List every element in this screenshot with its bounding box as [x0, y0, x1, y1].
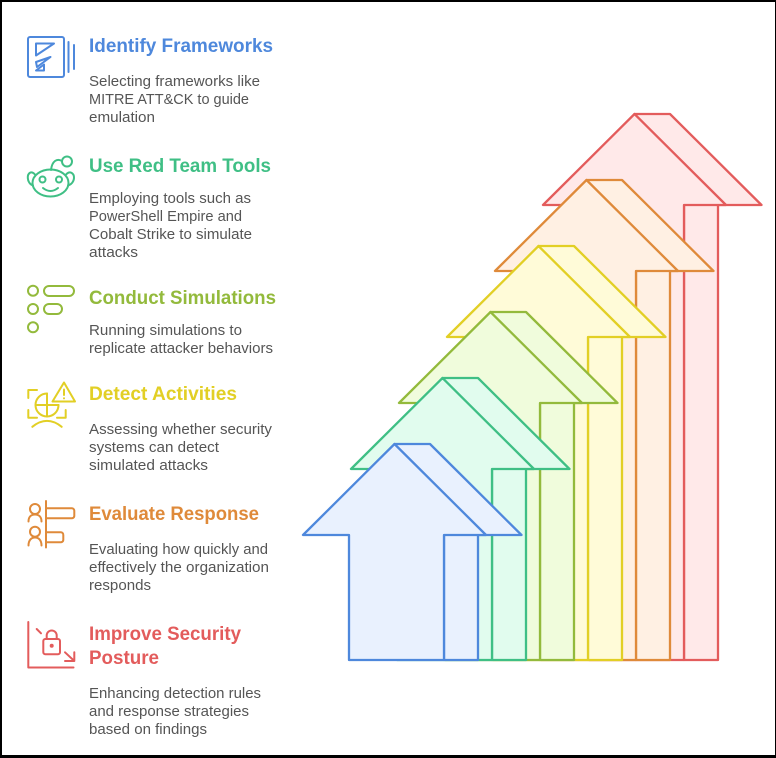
description [89, 323, 273, 357]
icon: framework document [28, 37, 74, 77]
stepped arrows chart [303, 114, 762, 660]
description: Enhancing detection rules [89, 686, 261, 702]
icon: robot face [28, 156, 74, 196]
description [89, 686, 261, 738]
description: PowerShell Empire and [89, 209, 242, 225]
arrow: green [351, 378, 570, 660]
arrow: yellow [447, 246, 666, 660]
panel: detect activities [28, 382, 273, 474]
description: simulated attacks [89, 458, 208, 474]
description: Evaluating how quickly and [89, 542, 268, 558]
description [89, 542, 269, 594]
description [89, 191, 252, 261]
description: MITRE ATT&CK to guide [89, 92, 249, 108]
heading: Identify Frameworks [89, 35, 273, 57]
heading [89, 623, 241, 669]
description: Employing tools such as [89, 191, 251, 207]
description: Assessing whether security [89, 422, 273, 438]
description [89, 422, 273, 474]
description: responds [89, 578, 151, 594]
arrow: olive [399, 312, 618, 660]
panel: use red team tools [28, 155, 271, 261]
panel: identify frameworks [28, 35, 273, 126]
description: Selecting frameworks like [89, 74, 260, 90]
arrow: red [543, 114, 762, 660]
description: replicate attacker behaviors [89, 341, 273, 357]
icon: lock on declining chart [28, 622, 74, 668]
description: Running simulations to [89, 323, 242, 339]
heading: Posture [89, 647, 159, 669]
description: and response strategies [89, 704, 249, 720]
heading: Evaluate Response [89, 503, 259, 525]
description: systems can detect [89, 440, 219, 456]
description [89, 74, 260, 126]
arrow: orange [495, 180, 714, 660]
description: effectively the organization [89, 560, 269, 576]
icon: scan with warning [28, 382, 75, 427]
panel: conduct simulations [28, 286, 276, 357]
heading: Conduct Simulations [89, 287, 276, 309]
heading: Improve Security [89, 623, 241, 645]
icon: list of circles and pills [28, 286, 74, 332]
description: Cobalt Strike to simulate [89, 227, 252, 243]
description: emulation [89, 110, 155, 126]
icon: people with bars [28, 501, 74, 548]
description: attacks [89, 245, 138, 261]
arrow: blue [303, 444, 522, 660]
description: based on findings [89, 722, 207, 738]
heading: Use Red Team Tools [89, 155, 271, 177]
panel: improve security posture [28, 622, 261, 738]
panel: evaluate response [28, 501, 269, 594]
heading: Detect Activities [89, 383, 237, 405]
